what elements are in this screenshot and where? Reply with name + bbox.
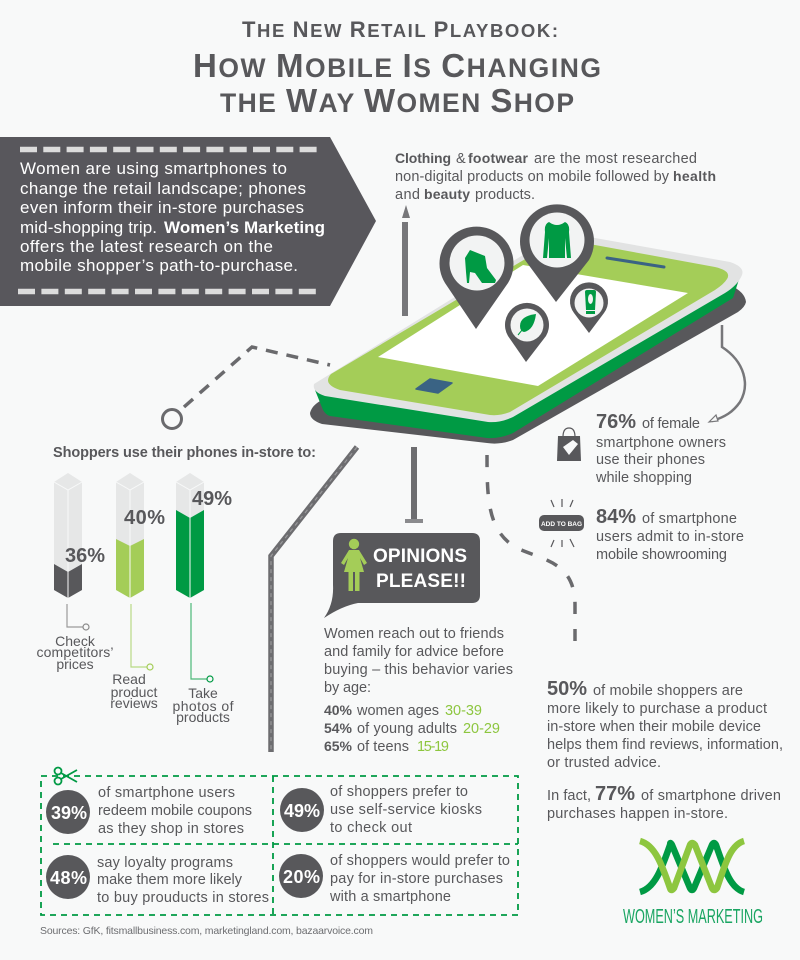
panel: coupon box [41,768,518,915]
text: most researched products: non-digital products on mobile followed by [395,169,670,185]
text: most researched products: health [673,168,716,184]
stat: 84% showrooming: of smartphone [642,511,737,527]
illustration: phone [310,204,746,444]
text: 50% more likely [547,678,783,771]
icon: shopping bag [557,428,581,461]
panel: intro arrow banner: Women’s Marketing [164,218,325,237]
text: most researched products: Clothing [395,150,451,166]
text: opinions by age: of young adults [357,721,457,737]
text: opinions by age: 40% [324,702,353,718]
text: 50% more likely: more likely to purchase a product [547,701,767,717]
icon: scissors [54,768,77,784]
stat: 20% smartphone pay [279,853,510,905]
text: most researched products: and [395,187,420,203]
stat: 76% female smartphone owners: of female [642,416,700,432]
bar: take photos of products 49%: Take [188,685,218,701]
stat: 48% loyalty: to buy prouducts in stores [97,890,269,906]
stat: 39% coupons: 39% [51,803,87,823]
stat: 48% loyalty: 48% [50,868,87,888]
bar: check competitors' prices 36% [36,473,114,672]
stat: 39% coupons: of smartphone users [98,785,235,801]
text: most researched products [395,150,716,203]
stat: 76% female smartphone owners: use their phones [596,452,705,468]
text: 77% in-store: In fact, [547,788,591,804]
icon: shoe pin [439,227,513,329]
stat: 49% kiosks: to check out [330,820,412,836]
stat: 76% female smartphone owners [557,411,726,486]
title: HOW MOBILE IS CHANGING [193,47,601,84]
text: opinions by age: 65% [324,738,353,754]
panel: intro arrow banner: Women are using smartphones to [20,159,287,178]
stat: 48% loyalty: say loyalty programs [97,855,233,871]
title [193,17,601,119]
stat: 39% coupons: redeem mobile coupons [98,803,252,819]
stat: 48% loyalty: make them more likely [97,872,243,888]
bar: take photos of products 49% [172,473,234,725]
icon: add to bag button [539,499,584,547]
bar: take photos of products 49%: products [176,709,230,725]
title: THE WAY WOMEN SHOP [220,82,574,119]
stat: 76% female smartphone owners: smartphone owners [596,435,726,451]
bar chart: in-store phone uses [36,473,234,725]
text: 50% more likely: or trusted advice. [547,755,661,771]
callout: opinions please speech bubble: PLEASE!! [376,571,466,592]
icon: tube pin [570,282,608,333]
panel: intro arrow banner: change the retail landscape; phones [20,179,306,198]
arrow: line to opinions bubble [405,447,423,523]
arrow: dashed path to ring [162,347,330,428]
text: opinions by age: 54% [324,720,353,736]
text: 77% in-store [547,783,781,822]
text: 50% more likely: helps them find reviews, information, [547,737,783,753]
text: 77% in-store: of smartphone driven [641,788,781,804]
text: opinions by age: buying – this behavior varies [324,662,513,678]
icon: shirt pin [520,204,594,302]
heading: shoppers use phones: Shoppers use their phones in-store to: [53,445,316,461]
panel: intro arrow banner: mobile shopper’s path-to-purchase. [20,256,298,275]
stat: 49% kiosks [280,784,482,836]
text: 77% in-store: purchases happen in-store. [547,806,728,822]
bar: read product reviews 40%: Read [112,671,146,687]
icon: woman [341,539,367,591]
arrow: up to text [402,205,410,316]
panel: intro arrow banner [0,137,376,306]
logo: women's marketing [623,841,763,928]
callout: opinions please speech bubble [324,533,480,618]
sources: Sources: GfK, fitsmallbusiness.com, marketingland.com, bazaarvoice.com [40,925,373,937]
arrow: curved to 76% [709,325,745,422]
text: 50% more likely: 50% [547,678,587,700]
stat: 49% kiosks: 49% [284,801,320,821]
stat: 49% kiosks: use self-service kiosks [330,802,482,818]
stat: 39% coupons [46,785,252,837]
stat: 76% female smartphone owners: 76% [596,411,636,433]
bar: take photos of products 49%: photos of [172,698,234,714]
stat: 20% smartphone pay: 20% [283,867,320,887]
text: opinions by age: and family for advice before [324,644,504,660]
bar: check competitors' prices 36%: prices [56,656,94,672]
text: most researched products: & [456,151,466,167]
bar: take photos of products 49%: 49% [192,488,232,510]
bar: read product reviews 40%: reviews [110,695,158,711]
icon: add to bag button: ADD TO BAG [541,521,582,528]
text: most researched products: footwear [468,150,529,166]
stat: 20% smartphone pay: pay for in-store purchases [330,871,503,887]
bar: read product reviews 40% [110,473,165,711]
text: opinions by age: of teens [357,739,409,755]
panel: intro arrow banner: offers the latest research on the [20,237,273,256]
stat: 39% coupons: as they shop in stores [98,821,244,837]
bar: check competitors' prices 36%: competitors’ [36,644,114,660]
text: most researched products: are the most researched [534,151,697,167]
text: most researched products: products. [475,187,535,203]
text: 50% more likely: of mobile shoppers are [593,683,743,699]
title: THE NEW RETAIL PLAYBOOK: [242,17,558,42]
text: opinions by age: Women reach out to friends [324,626,504,642]
text: opinions by age: 15-19 [417,739,449,755]
stat: 84% showrooming: users admit to in-store [596,529,744,545]
panel: intro arrow banner: even inform their in-store purchases [20,198,304,217]
stat: 20% smartphone pay: of shoppers would prefer to [330,853,510,869]
stat: 84% showrooming [539,499,744,563]
text: opinions by age: 20-29 [463,721,500,737]
text: opinions by age [324,626,513,755]
bar: check competitors' prices 36%: 36% [65,545,105,567]
stat: 76% female smartphone owners: while shopping [595,470,692,486]
text: most researched products: beauty [424,186,470,202]
bar: read product reviews 40%: product [111,684,157,700]
stat: 84% showrooming: 84% [596,506,636,528]
text: opinions by age: women ages [356,703,439,719]
callout: opinions please speech bubble: OPINIONS [373,546,467,567]
icon: leaf pin [505,303,549,362]
stat: 48% loyalty [46,855,269,906]
text: 77% in-store: 77% [595,783,635,805]
stat: 84% showrooming: mobile showrooming [596,547,727,563]
text: opinions by age: by age: [324,680,371,696]
bar: check competitors' prices 36%: Check [55,633,96,649]
text: opinions by age: 30-39 [445,703,482,719]
panel: intro arrow banner: mid-shopping trip. [20,218,157,237]
bar: read product reviews 40%: 40% [124,507,165,529]
stat: 49% kiosks: of shoppers prefer to [330,784,468,800]
text: 50% more likely: in-store when their mobile device [547,719,761,735]
arrow: dashed curve to 50% stat [487,455,575,652]
arrow: long sketched line [271,447,357,752]
stat: 20% smartphone pay: with a smartphone [329,889,451,905]
